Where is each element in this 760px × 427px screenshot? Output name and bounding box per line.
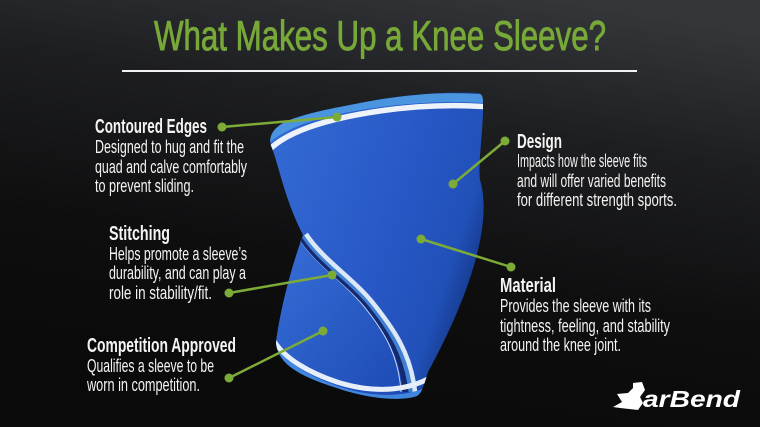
upper sleeve section (270, 92, 484, 399)
callout: stitching: durability, and can play a (109, 263, 247, 283)
heading: Contoured Edges (95, 116, 207, 138)
bottom edge blue band (272, 346, 428, 399)
description: Helps promote a sleeve’s (109, 244, 247, 264)
title underline (122, 70, 637, 72)
callout: stitching (109, 223, 336, 303)
knee sleeve illustration (270, 92, 484, 399)
connector dots (224, 374, 234, 382)
description: Provides the sleeve with its (500, 296, 651, 316)
bottom edge white band (274, 341, 430, 389)
description: Designed to hug and fit the (95, 137, 244, 157)
logo icon (613, 382, 645, 410)
top edge white band (268, 106, 490, 151)
connector line (229, 275, 332, 293)
heading: Design (517, 131, 562, 153)
callout: contoured edges: to prevent sliding. (95, 176, 194, 196)
connector dots (448, 180, 458, 188)
callout: material: around the knee joint. (500, 335, 621, 355)
lower sleeve section (276, 236, 372, 397)
connector dots (416, 234, 426, 244)
callout: contoured edges (95, 112, 342, 196)
callout: material: tightness, feeling, and stability (500, 316, 670, 336)
description: Qualifies a sleeve to be (87, 356, 214, 376)
seam dark band (302, 238, 406, 392)
callout: design (448, 131, 677, 210)
callout: design: for different strength sports. (517, 190, 677, 210)
callout: material (416, 234, 670, 355)
title: What Makes Up a Knee Sleeve? (154, 12, 606, 59)
heading: Stitching (109, 223, 170, 245)
connector dots (218, 122, 226, 132)
connector line (222, 117, 337, 127)
heading: Competition Approved (87, 335, 236, 357)
connector line (229, 331, 323, 378)
connector line (453, 141, 505, 184)
seam blue band (304, 236, 411, 392)
heading: Material (500, 275, 556, 297)
callout: competition approved (86, 326, 328, 395)
seam thin white line (300, 240, 401, 392)
description: Impacts how the sleeve fits (517, 151, 647, 171)
logo wordmark: arBend (643, 386, 741, 412)
connector dots (224, 288, 234, 298)
top edge dark band (274, 92, 480, 131)
callout: stitching: role in stability/fit. (109, 283, 212, 303)
callout: competition approved: worn in competition. (86, 375, 200, 395)
connector line (421, 239, 511, 267)
top edge light blue band (264, 98, 490, 142)
callout: design: and will offer varied benefits (517, 171, 666, 191)
seam white band (306, 234, 415, 392)
callout: contoured edges: quad and calve comfortably (95, 157, 247, 177)
logo: BarBend (613, 382, 741, 412)
